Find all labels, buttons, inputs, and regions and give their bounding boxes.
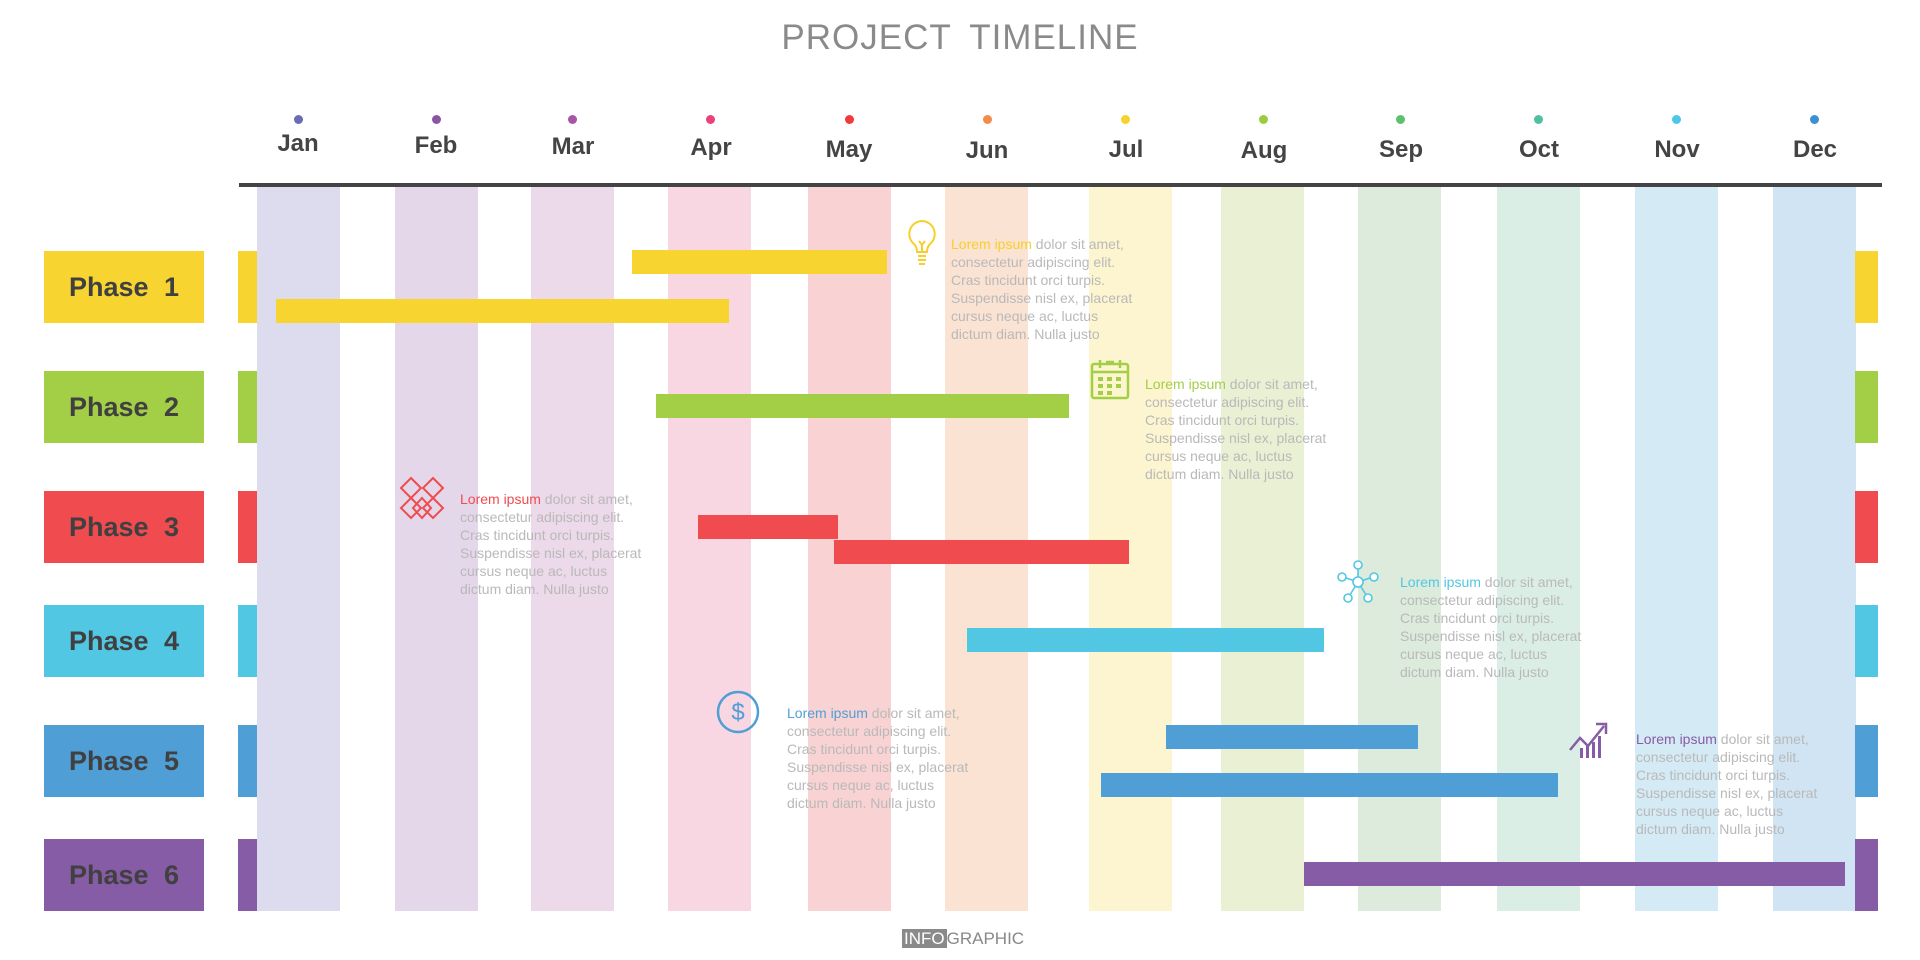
text block: phase 4 note: Cras tincidunt orci turpis. — [1400, 610, 1554, 626]
month labels: Feb — [415, 132, 457, 159]
month labels: Sep — [1379, 136, 1423, 163]
text block: phase 5 note: cursus neque ac, luctus — [787, 777, 934, 793]
icon: calendar — [1090, 360, 1130, 400]
title: PROJECT TIMELINE — [781, 18, 1139, 57]
text block: phase 6 note: dictum diam. Nulla justo — [1636, 821, 1785, 837]
text block: phase 6 note: Cras tincidunt orci turpis. — [1636, 767, 1790, 783]
phase labels: Phase 3 — [69, 512, 179, 542]
text block: phase 2 note: Suspendisse nisl ex, placerat — [1145, 430, 1326, 446]
month labels: Mar — [552, 133, 594, 160]
phase labels — [44, 251, 204, 911]
text block: phase 2 note: Lorem ipsum dolor sit amet, — [1145, 376, 1318, 392]
icon: network — [1337, 560, 1379, 603]
month labels: Jun — [966, 137, 1008, 164]
footer logo: INFOGRAPHIC — [904, 929, 1024, 948]
text block: phase 3 note: Cras tincidunt orci turpis. — [460, 527, 614, 543]
gantt bars — [276, 250, 1845, 886]
text block: phase 3 note: consectetur adipiscing elit. — [460, 509, 624, 525]
month labels: Jul — [1109, 136, 1143, 163]
text block: phase 3 note: Lorem ipsum dolor sit amet, — [460, 491, 633, 507]
icon: growth chart — [1569, 722, 1608, 758]
text block: phase 4 note — [1400, 574, 1582, 680]
text block: phase 6 note — [1636, 731, 1818, 837]
month labels: May — [826, 136, 872, 163]
text block: phase 2 note: Cras tincidunt orci turpis. — [1145, 412, 1299, 428]
text block: phase 5 note: consectetur adipiscing elit. — [787, 723, 951, 739]
month labels: Nov — [1654, 136, 1700, 163]
icon: light bulb — [908, 220, 936, 265]
month labels: Oct — [1519, 136, 1559, 163]
text block: phase 1 note: Lorem ipsum dolor sit amet, — [951, 236, 1124, 252]
text block: phase 6 note: consectetur adipiscing elit. — [1636, 749, 1800, 765]
text block: phase 4 note: Lorem ipsum dolor sit amet, — [1400, 574, 1573, 590]
text block: phase 4 note: consectetur adipiscing elit. — [1400, 592, 1564, 608]
text block: phase 1 note: consectetur adipiscing elit. — [951, 254, 1115, 270]
phase labels: Phase 5 — [69, 746, 179, 776]
phase labels: Phase 6 — [69, 860, 179, 890]
icon: dollar: $ — [731, 699, 745, 726]
text block: phase 1 note: Cras tincidunt orci turpis. — [951, 272, 1105, 288]
text block: phase 2 note: dictum diam. Nulla justo — [1145, 466, 1294, 482]
text block: phase 6 note: Lorem ipsum dolor sit amet, — [1636, 731, 1809, 747]
month labels: Apr — [690, 134, 732, 161]
axis line — [239, 183, 1882, 187]
text block: phase 2 note: consectetur adipiscing elit. — [1145, 394, 1309, 410]
text block: phase 1 note: dictum diam. Nulla justo — [951, 326, 1100, 342]
text block: phase 6 note: cursus neque ac, luctus — [1636, 803, 1783, 819]
text block: phase 2 note — [1145, 376, 1326, 482]
text block: phase 4 note: cursus neque ac, luctus — [1400, 646, 1547, 662]
icon: boxes — [400, 476, 444, 520]
text block: phase 3 note — [460, 491, 642, 597]
text block: phase 4 note: Suspendisse nisl ex, placerat — [1400, 628, 1581, 644]
row stubs — [238, 251, 1878, 911]
text block: phase 5 note — [787, 705, 968, 811]
text block: phase 1 note: cursus neque ac, luctus — [951, 308, 1098, 324]
text block: phase 1 note — [951, 236, 1132, 342]
text block: phase 4 note: dictum diam. Nulla justo — [1400, 664, 1549, 680]
text block: phase 3 note: dictum diam. Nulla justo — [460, 581, 609, 597]
month labels: Jan — [277, 130, 319, 157]
text block: phase 5 note: Lorem ipsum dolor sit amet, — [787, 705, 960, 721]
text block: phase 5 note: Suspendisse nisl ex, placerat — [787, 759, 968, 775]
month labels: Aug — [1241, 137, 1287, 164]
phase labels: Phase 4 — [69, 626, 179, 656]
text block: phase 5 note: Cras tincidunt orci turpis. — [787, 741, 941, 757]
month labels — [277, 115, 1837, 164]
text block: phase 3 note: Suspendisse nisl ex, placerat — [460, 545, 641, 561]
text block: phase 3 note: cursus neque ac, luctus — [460, 563, 607, 579]
icon: dollar — [716, 690, 760, 734]
text block: phase 1 note: Suspendisse nisl ex, placerat — [951, 290, 1132, 306]
text block: phase 5 note: dictum diam. Nulla justo — [787, 795, 936, 811]
phase labels: Phase 1 — [69, 272, 179, 302]
month labels: Dec — [1793, 136, 1837, 163]
phase labels: Phase 2 — [69, 392, 179, 422]
text block: phase 2 note: cursus neque ac, luctus — [1145, 448, 1292, 464]
text block: phase 6 note: Suspendisse nisl ex, placerat — [1636, 785, 1817, 801]
